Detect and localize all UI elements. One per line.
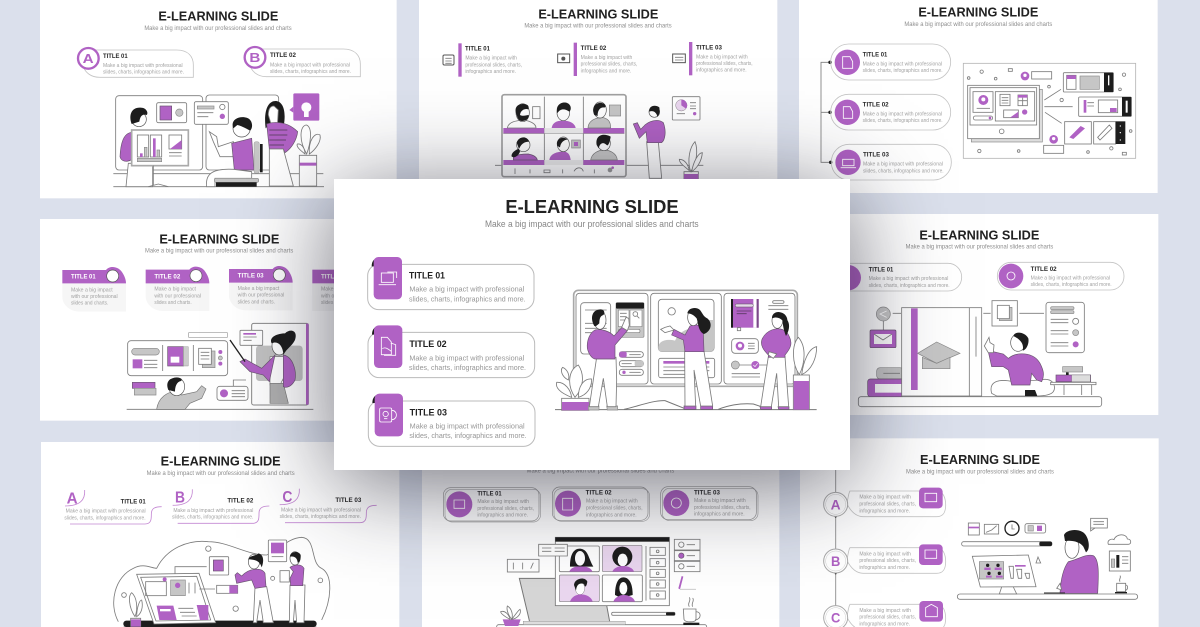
plant left bbox=[556, 365, 592, 410]
card 02: infographics and more. bbox=[586, 512, 637, 518]
step B: slides, charts, infographics and more. bbox=[172, 515, 253, 521]
subtitle: Make a big impact with our professional slides and charts bbox=[524, 24, 672, 30]
slide: top middle bbox=[419, 0, 777, 185]
card 02: Make a big impact bbox=[154, 287, 196, 293]
card A bbox=[78, 48, 193, 77]
subtitle: Make a big impact with our professional slides and charts bbox=[145, 249, 293, 255]
subtitle: Make a big impact with our professional slides and charts bbox=[144, 26, 292, 32]
pill 01: slides, charts, infographics and more. bbox=[869, 283, 950, 289]
heading: E-LEARNING SLIDE bbox=[161, 454, 281, 469]
illustration: video call bbox=[495, 95, 703, 179]
row B: infographics and more. bbox=[859, 565, 910, 571]
step A: A bbox=[67, 490, 78, 507]
pill 02 bbox=[997, 262, 1124, 290]
card 01: infographics and more. bbox=[477, 513, 528, 519]
heading: E-LEARNING SLIDE bbox=[158, 9, 278, 24]
card B bbox=[245, 47, 360, 77]
card A: A bbox=[83, 51, 94, 66]
card A: TITLE 01 bbox=[103, 53, 128, 60]
subtitle: Make a big impact with our professional slides and charts bbox=[906, 469, 1054, 475]
illustration: dashboard frame bbox=[963, 63, 1136, 158]
ground bbox=[555, 401, 817, 410]
card 03: slides and charts. bbox=[238, 299, 275, 305]
pill 03: TITLE 03 bbox=[863, 152, 889, 159]
card 02: slides and charts. bbox=[154, 300, 192, 306]
heading: E-LEARNING SLIDE bbox=[159, 231, 279, 246]
row C: Make a big impact with bbox=[859, 608, 911, 614]
card: title 03: slides, charts, infographics and more. bbox=[409, 431, 527, 440]
illustration: student with book bbox=[858, 301, 1102, 407]
illustration: tablet and team bbox=[114, 537, 330, 627]
pill 02: Make a big impact with professional bbox=[863, 111, 942, 117]
subtitle: Make a big impact with our professional slides and charts bbox=[906, 244, 1053, 250]
card 04: Make a big impact bbox=[321, 287, 363, 293]
item 03 bbox=[673, 42, 753, 75]
step C bbox=[280, 489, 377, 523]
subtitle: Make a big impact with our professional slides and charts bbox=[147, 471, 295, 477]
card: title 03: TITLE 03 bbox=[410, 407, 447, 417]
card: title 01 bbox=[368, 257, 534, 310]
row B: Make a big impact with bbox=[859, 551, 911, 557]
card: title 01: Make a big impact with professional bbox=[409, 285, 525, 294]
pill 01: slides, charts, infographics and more. bbox=[863, 68, 943, 74]
person 3 bbox=[760, 312, 791, 409]
heading: E-LEARNING SLIDE bbox=[538, 6, 658, 21]
card 04 bbox=[312, 270, 376, 311]
illustration: team at whiteboards bbox=[113, 93, 324, 187]
pill 01: TITLE 01 bbox=[869, 267, 894, 274]
card 04: with our professional bbox=[321, 293, 368, 299]
card 01: Make a big impact bbox=[71, 287, 113, 293]
pill 02: TITLE 02 bbox=[1031, 266, 1057, 273]
card A: Make a big impact with professional bbox=[103, 63, 183, 69]
card 02: professional slides, charts, bbox=[586, 506, 643, 512]
item 01: TITLE 01 bbox=[465, 46, 490, 53]
row B: professional slides, charts, bbox=[859, 558, 916, 564]
item 01: professional slides, charts, bbox=[465, 62, 522, 68]
card B: slides, charts, infographics and more. bbox=[270, 69, 351, 75]
row B bbox=[824, 544, 946, 573]
row A: Make a big impact with bbox=[859, 495, 911, 501]
pill 01: TITLE 01 bbox=[863, 52, 888, 59]
panel content: notebook and profile bbox=[731, 299, 788, 377]
pill 01 bbox=[835, 263, 962, 291]
pill 02: Make a big impact with professional bbox=[1031, 275, 1110, 281]
item 02: Make a big impact with bbox=[581, 55, 632, 61]
card 02 bbox=[146, 267, 209, 311]
step B: Make a big impact with professional bbox=[173, 508, 253, 514]
pill 02: TITLE 02 bbox=[863, 102, 889, 109]
item 02: infographics and more. bbox=[581, 68, 631, 74]
slide: bottom right bbox=[800, 438, 1159, 627]
item 03: professional slides, charts, bbox=[696, 61, 753, 67]
card 01 bbox=[443, 488, 541, 522]
step A bbox=[64, 490, 162, 524]
card B: TITLE 02 bbox=[270, 52, 296, 59]
card 01: with our professional bbox=[71, 294, 118, 300]
card B: Make a big impact with professional bbox=[270, 62, 350, 68]
plant right with pot bbox=[793, 337, 817, 410]
card 02 bbox=[552, 487, 650, 521]
heading: E-LEARNING SLIDE bbox=[920, 452, 1040, 467]
step B: B bbox=[175, 490, 185, 507]
card 02: with our professional bbox=[154, 293, 201, 299]
item 01 bbox=[443, 43, 522, 77]
slide: middle left bbox=[40, 219, 400, 421]
card 01: Make a big impact with bbox=[477, 499, 529, 505]
item 03: TITLE 03 bbox=[696, 44, 722, 51]
slide: middle right bbox=[673, 214, 1158, 415]
card 03: TITLE 03 bbox=[694, 489, 720, 496]
card: title 02: Make a big impact with professional bbox=[409, 353, 525, 362]
card 04: TITLE 04 bbox=[321, 273, 347, 280]
card: title 01: slides, charts, infographics and more. bbox=[409, 295, 526, 304]
card 02: TITLE 02 bbox=[586, 490, 612, 497]
step C: slides, charts, infographics and more. bbox=[280, 514, 361, 520]
row B: B bbox=[831, 553, 840, 569]
card 01 bbox=[62, 267, 126, 312]
card 02: Make a big impact with bbox=[586, 499, 638, 505]
connector bbox=[821, 61, 832, 164]
row A bbox=[824, 488, 946, 517]
step B bbox=[172, 489, 269, 523]
illustration: teacher presenting bbox=[127, 323, 313, 409]
person 2 bbox=[661, 308, 713, 409]
item 03: Make a big impact with bbox=[696, 54, 748, 60]
card 03 bbox=[661, 487, 758, 521]
heading: E-LEARNING SLIDE bbox=[505, 196, 679, 217]
card 04: slides and charts. bbox=[321, 300, 358, 306]
step A: Make a big impact with professional bbox=[66, 509, 146, 515]
slide: bottom left bbox=[41, 442, 399, 627]
item 03: infographics and more. bbox=[696, 68, 747, 74]
item 02: professional slides, charts, bbox=[581, 62, 637, 68]
slide: top left bbox=[40, 0, 397, 198]
card 03: professional slides, charts, bbox=[694, 505, 751, 511]
step B: TITLE 02 bbox=[227, 498, 254, 505]
card: title 01: TITLE 01 bbox=[409, 271, 445, 281]
panel content: picture and card bbox=[658, 299, 715, 378]
pill 02 bbox=[831, 94, 951, 130]
card 03: infographics and more. bbox=[694, 512, 745, 518]
subtitle: Make a big impact with our professional slides and charts bbox=[527, 469, 674, 475]
step C: Make a big impact with professional bbox=[281, 507, 361, 513]
card: title 02: slides, charts, infographics and more. bbox=[409, 363, 526, 372]
pill 03: Make a big impact with professional bbox=[863, 162, 943, 168]
step C: TITLE 03 bbox=[335, 497, 362, 504]
heading: E-LEARNING SLIDE bbox=[919, 227, 1039, 242]
slide: bottom middle bbox=[422, 460, 779, 627]
item 01: Make a big impact with bbox=[465, 56, 517, 62]
illustration: laptop video call bbox=[497, 537, 707, 627]
item 02: TITLE 02 bbox=[581, 45, 607, 52]
card 01: TITLE 01 bbox=[71, 274, 96, 281]
card 03: with our professional bbox=[238, 293, 284, 299]
card: title 02: TITLE 02 bbox=[409, 339, 447, 349]
card 02: TITLE 02 bbox=[154, 273, 181, 280]
card: title 02 bbox=[368, 325, 535, 378]
panel content: documents and search bbox=[581, 303, 644, 375]
card 01: professional slides, charts, bbox=[477, 506, 534, 512]
card: title 03 bbox=[368, 394, 535, 446]
pill 01 bbox=[831, 44, 951, 80]
card: title 03: Make a big impact with professional bbox=[410, 421, 525, 430]
slide: top right bbox=[799, 0, 1158, 193]
row A: professional slides, charts, bbox=[859, 501, 916, 507]
row A: infographics and more. bbox=[859, 508, 910, 514]
subtitle: Make a big impact with our professional slides and charts bbox=[485, 219, 699, 229]
pill 02: slides, charts, infographics and more. bbox=[1031, 282, 1112, 288]
item 02 bbox=[558, 43, 637, 76]
illustration: team at board bbox=[555, 290, 817, 410]
row C: C bbox=[831, 610, 840, 626]
step A: TITLE 01 bbox=[121, 498, 146, 505]
card B: B bbox=[249, 50, 261, 65]
row C: professional slides, charts, bbox=[859, 615, 916, 621]
step C: C bbox=[282, 489, 293, 506]
pill 03: slides, charts, infographics and more. bbox=[863, 168, 944, 174]
heading: E-LEARNING SLIDE bbox=[918, 5, 1038, 20]
center slide bbox=[334, 179, 850, 470]
card A: slides, charts, infographics and more. bbox=[103, 70, 184, 76]
pill 02: slides, charts, infographics and more. bbox=[863, 118, 943, 124]
card 03 bbox=[229, 266, 293, 310]
row C bbox=[824, 601, 946, 627]
step A: slides, charts, infographics and more. bbox=[64, 515, 146, 521]
pill 01: Make a big impact with professional bbox=[869, 276, 948, 282]
pill 01: Make a big impact with professional bbox=[863, 61, 942, 67]
board bbox=[574, 290, 797, 386]
card 01: slides and charts. bbox=[71, 301, 108, 307]
subtitle: Make a big impact with our professional slides and charts bbox=[904, 22, 1052, 28]
row A: A bbox=[831, 496, 841, 512]
card 03: TITLE 03 bbox=[238, 273, 264, 280]
timeline bbox=[835, 468, 837, 627]
card 03: Make a big impact with bbox=[694, 498, 746, 504]
person 1 bbox=[587, 309, 629, 410]
item 01: infographics and more. bbox=[465, 69, 516, 75]
card 01: TITLE 01 bbox=[477, 490, 502, 497]
pill 03 bbox=[831, 144, 951, 180]
illustration: student at monitor bbox=[957, 518, 1138, 599]
card 03: Make a big impact bbox=[238, 286, 280, 292]
